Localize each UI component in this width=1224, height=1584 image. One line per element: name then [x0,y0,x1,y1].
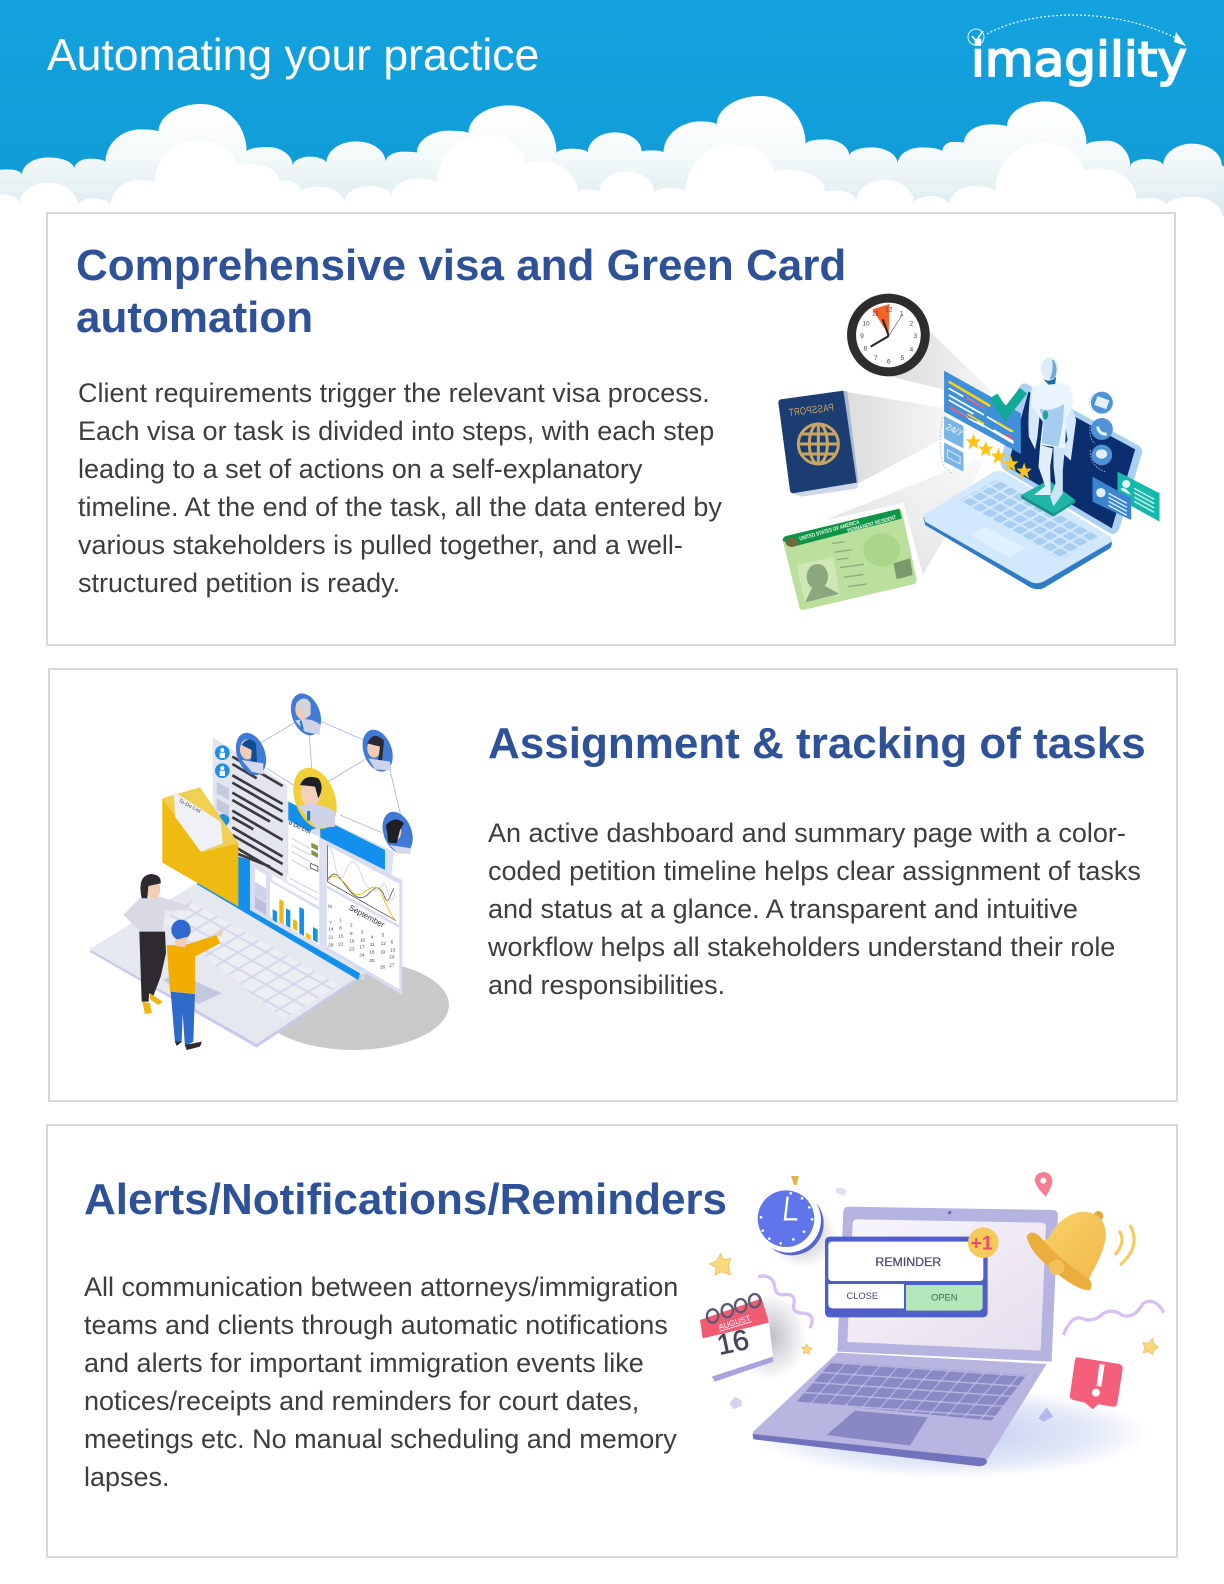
heading: comprehensive automation: Comprehensive visa and Green Card [76,241,846,290]
panel: line chart and calendar: 5 [382,933,385,938]
heading: comprehensive automation: automation [76,293,313,342]
heading: assignment & tracking: Assignment & tracking of tasks [488,719,1146,768]
icon: clock: 4 [910,346,914,353]
panel: line chart and calendar: 15 [338,933,344,938]
panel: line chart and calendar: 25 [369,958,375,963]
decorations: squiggles [758,1276,1164,1335]
panel: visa and Green Card automation [47,213,1175,645]
body text: visa process: leading to a set of actions on a self-explanatory [78,454,643,484]
icon: clock [847,294,930,376]
panel: line chart and calendar: 19 [380,949,386,954]
reminder dialog: CLOSE [847,1291,878,1301]
figure: woman [123,874,194,1014]
panel: bar chart [250,820,323,947]
icon: clock: 12 [885,307,893,314]
icon: calendar: 16 [714,1324,752,1362]
reminder dialog: REMINDER [875,1255,941,1269]
icon: clock: 9 [860,333,864,340]
panel: line chart and calendar: 1 [339,918,342,923]
icon: green card [783,503,923,611]
laptop [752,1207,1058,1466]
body text: visa process: various stakeholders is pulled together, and a well- [78,530,683,560]
icon: green card: UNITED STATES OF AMERICA [799,519,861,543]
panel: line chart and calendar: 24 [359,953,365,958]
panel: line chart and calendar: September [347,903,386,930]
reminder dialog: OPEN [931,1292,958,1302]
icon: alarm clock [756,1176,824,1255]
reminder dialog [825,1227,999,1317]
body text: dashboard: coded petition timeline helps clear assignment of tasks [488,856,1141,886]
panel: line chart and calendar: 16 [349,939,355,944]
body text: visa process: Each visa or task is divided into steps, with each step [78,416,714,446]
panel: line chart and calendar: 21 [328,935,334,940]
icon: bell [1027,1211,1134,1290]
body text: visa process: Client requirements trigger the relevant visa process. [78,378,710,408]
panel: assignment and tracking [49,669,1177,1101]
panel: line chart and calendar: 6 [391,939,394,944]
icon: calendar [700,1294,773,1382]
icon: clock: 7 [874,355,878,362]
panel: line chart and calendar: 2 [350,923,353,928]
icon: passport [778,391,858,497]
body text: visa process: structured petition is ready. [78,568,400,598]
panel: line chart and calendar: 3 [361,929,364,934]
panel: line chart and calendar: 17 [359,944,365,949]
body text: communication: and alerts for important immigration events like [84,1348,644,1378]
body text: dashboard: and responsibilities. [488,970,725,1000]
laptop [89,802,394,1048]
icon: clock: 3 [914,333,918,340]
icon: envelope [162,787,238,907]
panel: line chart and calendar: 28 [328,943,334,948]
icon: alert badge [1070,1357,1123,1409]
icons: contact channels [1089,392,1160,522]
network links [260,722,401,833]
panel: line chart and calendar: 12 [381,941,386,946]
panel: task list [213,737,287,884]
body text: dashboard: and status at a glance. A transparent and intuitive [488,894,1078,924]
icon: clock: 6 [887,358,891,365]
body text: communication: meetings etc. No manual scheduling and memory [84,1424,677,1454]
icon: clock: 10 [862,320,870,327]
icon: clock: 11 [872,310,879,317]
icon: passport: PASSPORT [788,402,834,418]
panel: line chart and calendar: 26 [380,964,386,969]
panel: line chart and calendar: 8 [339,925,342,930]
icon: green card: PERMANENT RESIDENT [847,514,898,535]
heading: alerts: Alerts/Notifications/Reminders [84,1175,727,1224]
body text: visa process: timeline. At the end of the task, all the data entered by [78,492,722,522]
title: Automating your practice [47,31,539,80]
panel: line chart and calendar: 14 [328,927,334,932]
body text: communication: teams and clients through automatic notifications [84,1310,668,1340]
panel: line chart and calendar: 27 [389,963,395,968]
illustration: laptop with reminder [700,1172,1164,1478]
logo: imagility: imagility [971,32,1187,88]
robot [1021,357,1076,517]
icon: laptop with robot [923,357,1160,589]
figure: man [167,920,224,1050]
avatars [230,689,418,858]
header banner [0,0,1224,220]
icon: clock: 2 [910,320,914,327]
body text: dashboard: An active dashboard and summary page with a color- [488,818,1126,848]
panel: line chart and calendar [325,842,402,995]
icon: clock: 8 [864,346,868,353]
panel: line chart and calendar: 23 [349,947,355,952]
panel: line chart and calendar: 13 [390,948,396,953]
panel: bar chart: o Do List [287,820,312,836]
body text: dashboard: workflow helps all stakeholders understand their role [487,932,1115,962]
body text: communication: lapses. [84,1462,170,1492]
panel: line chart and calendar: 4 [371,935,374,940]
panel: line chart and calendar: 7 [329,920,332,925]
decorations: stars and shapes [709,1172,1158,1422]
body text: communication: All communication between attorneys/immigration [84,1272,678,1302]
panel: line chart and calendar: 9 [350,931,353,936]
icon: calendar: AUGUST [717,1314,752,1332]
panel: line chart and calendar: 18 [369,949,375,954]
illustration: team dashboard on laptop [89,689,449,1050]
panel: line chart and calendar: 11 [370,942,375,947]
panel: alerts and reminders [47,1125,1177,1557]
illustration: automation laptop with clock, passport and green card [778,294,1160,611]
icon: clock: 1 [900,311,904,318]
clouds [0,96,1224,220]
icon: envelope: To-Do List [177,798,202,815]
icon: laptop with robot: 24/7 [944,421,964,439]
panel: line chart and calendar: fri [328,904,332,909]
icon: clock: 5 [901,355,905,362]
panel: line chart and calendar: 10 [360,938,366,943]
panel: line chart and calendar: 20 [389,954,395,959]
panel: line chart and calendar: 22 [338,941,344,946]
reminder dialog: +1 [971,1233,993,1254]
body text: communication: notices/receipts and reminders for court dates, [84,1386,639,1416]
